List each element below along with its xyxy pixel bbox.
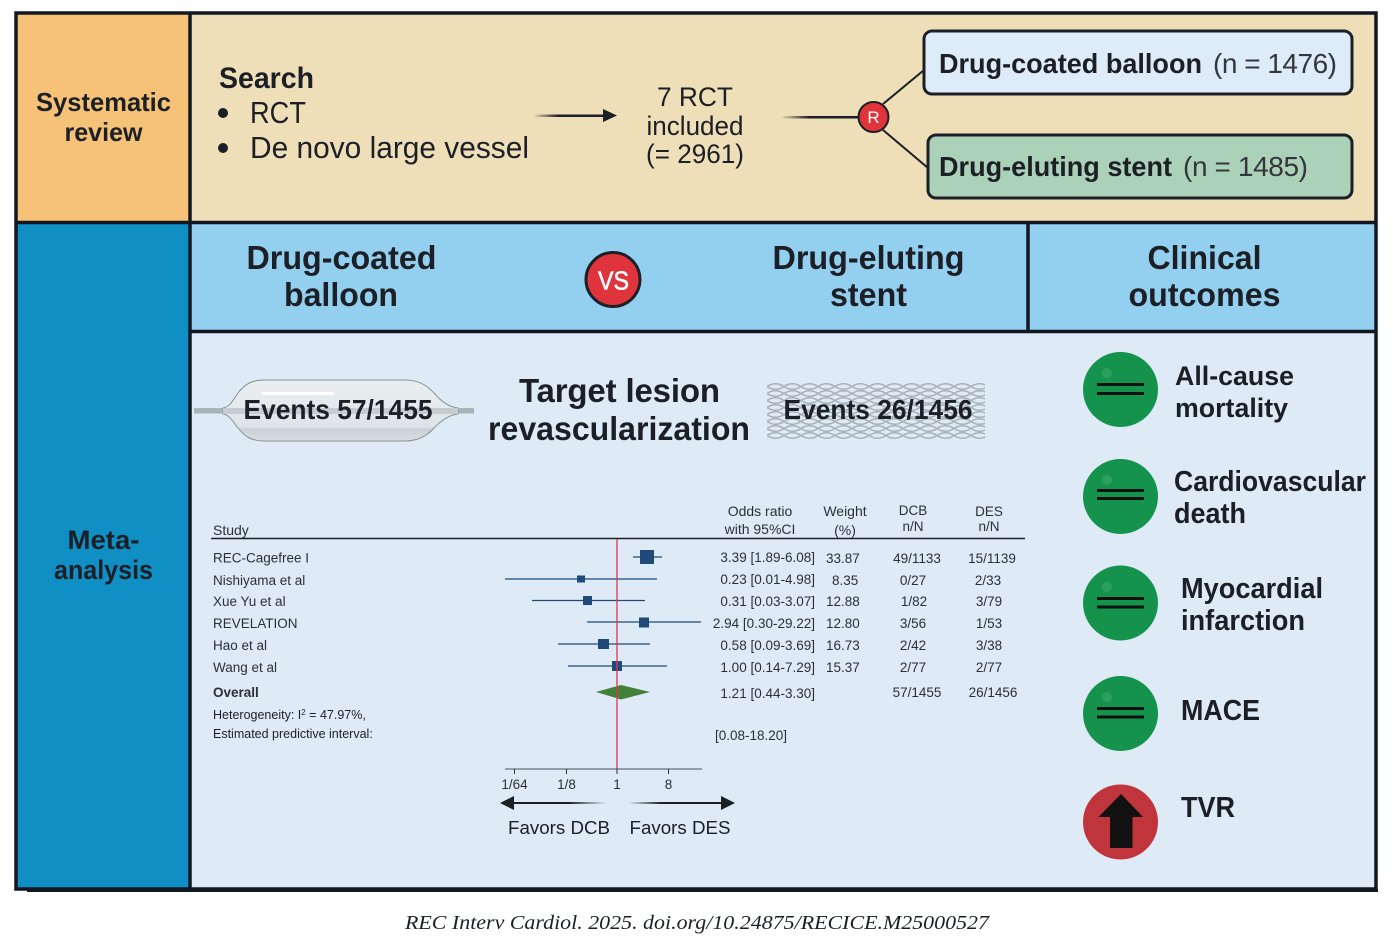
icon: stent with events: Events 26/1456 bbox=[784, 394, 972, 425]
arm: drug-eluting stent bbox=[928, 135, 1352, 198]
outcome: cardiovascular death: Cardiovascular bbox=[1174, 466, 1366, 498]
overall effect diamond bbox=[596, 685, 650, 700]
forest plot DCB events: 2/42 bbox=[900, 638, 926, 653]
included trials text: (= 2961) bbox=[646, 139, 744, 169]
forest plot DCB events bbox=[893, 551, 941, 700]
forest plot DES events: 3/79 bbox=[976, 594, 1002, 609]
outcome: myocardial infarction bbox=[1083, 566, 1323, 640]
forest plot study names: = 47.97%, bbox=[306, 708, 366, 722]
forest plot axis: 1 bbox=[613, 777, 621, 792]
panel: comparison header bbox=[190, 224, 1028, 331]
outcome: all-cause mortality bbox=[1083, 352, 1294, 427]
randomization connector: R bbox=[867, 108, 880, 127]
icon: balloon with events bbox=[194, 380, 474, 441]
forest plot weights bbox=[826, 551, 860, 675]
icon: up arrow bbox=[1083, 784, 1158, 860]
panel: meta-analysis label bbox=[17, 224, 190, 888]
panel: clinical outcomes header: outcomes bbox=[1128, 276, 1280, 313]
search criteria text: De novo large vessel bbox=[250, 130, 529, 165]
forest plot weights: 12.80 bbox=[826, 616, 860, 631]
forest plot column headers: Weight bbox=[823, 503, 867, 519]
forest plot DCB events: 2/77 bbox=[900, 660, 926, 675]
forest plot study names: REVELATION bbox=[213, 616, 298, 631]
outcome: TVR: TVR bbox=[1181, 792, 1235, 824]
arrow: favors DCB: Favors DCB bbox=[508, 817, 610, 838]
forest plot weights: 15.37 bbox=[826, 660, 860, 675]
icon: stent with events bbox=[767, 383, 985, 439]
forest plot column headers: with 95%CI bbox=[724, 521, 795, 537]
search criteria text bbox=[218, 62, 529, 165]
outcome: MACE bbox=[1083, 676, 1260, 751]
forest plot study names: Xue Yu et al bbox=[213, 594, 286, 609]
no-effect reference line bbox=[616, 539, 618, 769]
forest plot study names: Heterogeneity: I bbox=[213, 708, 301, 722]
forest plot DCB events: 0/27 bbox=[900, 573, 926, 588]
included trials text bbox=[646, 82, 744, 169]
forest plot DES events bbox=[968, 551, 1017, 700]
heading: drug-coated balloon: balloon bbox=[284, 276, 398, 313]
icon: equal bbox=[1083, 676, 1158, 751]
arm: drug-eluting stent: (n = 1485) bbox=[1183, 151, 1308, 182]
forest plot study names: Nishiyama et al bbox=[213, 573, 305, 588]
heading: target lesion revascularization: Target lesion bbox=[519, 372, 720, 409]
forest plot odds ratio values: 2.94 [0.30-29.22] bbox=[713, 616, 815, 631]
forest plot DCB events: 3/56 bbox=[900, 616, 926, 631]
arm: drug-coated balloon: (n = 1476) bbox=[1213, 48, 1337, 79]
icon: versus badge bbox=[586, 252, 640, 306]
forest plot axis bbox=[501, 769, 702, 792]
forest plot DCB events: 1/82 bbox=[901, 594, 927, 609]
search criteria text: Search bbox=[219, 62, 314, 95]
heading: drug-eluting stent: Drug-eluting bbox=[772, 239, 964, 276]
forest plot odds ratio values: [0.08-18.20] bbox=[715, 728, 787, 743]
forest plot study names: Wang et al bbox=[213, 660, 277, 675]
panel: systematic review label bbox=[17, 14, 190, 222]
outcome: all-cause mortality: All-cause bbox=[1175, 361, 1294, 391]
forest plot column headers: DCB bbox=[899, 503, 927, 518]
forest plot DES events: 2/33 bbox=[975, 573, 1001, 588]
included trials text: 7 RCT bbox=[657, 82, 733, 112]
panel: systematic review flow bbox=[190, 14, 1376, 222]
arm: drug-eluting stent: Drug-eluting stent bbox=[939, 151, 1172, 182]
forest plot odds ratio values: 0.31 [0.03-3.07] bbox=[720, 594, 815, 609]
panel: systematic review label: review bbox=[64, 117, 143, 147]
forest plot odds ratio values: 1.00 [0.14-7.29] bbox=[720, 660, 815, 675]
forest plot DCB events: 57/1455 bbox=[893, 685, 941, 700]
forest plot DES events: 2/77 bbox=[976, 660, 1002, 675]
panel: clinical outcomes header bbox=[1028, 224, 1376, 331]
forest plot study names: Estimated predictive interval: bbox=[213, 727, 373, 741]
forest plot DES events: 3/38 bbox=[976, 638, 1002, 653]
forest plot weights: 12.88 bbox=[826, 594, 860, 609]
forest plot axis: 1/64 bbox=[501, 777, 528, 792]
arrow: search to included bbox=[533, 109, 617, 122]
included trials text: included bbox=[646, 111, 744, 141]
forest plot odds ratio values bbox=[713, 550, 815, 743]
forest plot weights: 33.87 bbox=[826, 551, 860, 566]
heading: target lesion revascularization bbox=[488, 372, 750, 447]
arm: drug-coated balloon bbox=[924, 31, 1352, 94]
forest plot odds ratio values: 0.23 [0.01-4.98] bbox=[720, 572, 815, 587]
heading: drug-coated balloon: Drug-coated bbox=[246, 239, 436, 276]
forest plot study names: 2 bbox=[301, 708, 306, 717]
outcome: myocardial infarction: Myocardial bbox=[1181, 573, 1323, 605]
forest plot odds ratio values: 1.21 [0.44-3.30] bbox=[720, 686, 815, 701]
heading: drug-eluting stent bbox=[772, 239, 964, 313]
heading: target lesion revascularization: revascularization bbox=[488, 410, 750, 447]
forest plot weights: 8.35 bbox=[832, 573, 858, 588]
forest plot DCB events: 49/1133 bbox=[893, 551, 941, 566]
forest plot study names: Hao et al bbox=[213, 638, 267, 653]
forest plot column headers bbox=[213, 503, 1003, 538]
heading: drug-coated balloon bbox=[246, 239, 436, 313]
arrow: favors DES bbox=[628, 796, 735, 838]
citation: REC Interv Cardiol. 2025. doi.org/10.24875/RECICE.M25000527 bbox=[404, 912, 990, 934]
forest plot column headers: n/N bbox=[978, 519, 1000, 534]
outcome: myocardial infarction: infarction bbox=[1181, 605, 1305, 637]
panel: results bbox=[190, 332, 1376, 888]
randomization connector bbox=[781, 70, 928, 168]
panel: clinical outcomes header: Clinical bbox=[1148, 239, 1262, 276]
outcome: cardiovascular death: death bbox=[1174, 498, 1246, 530]
forest plot study names: REC-Cagefree I bbox=[213, 550, 309, 566]
forest plot axis: 8 bbox=[665, 777, 672, 792]
forest plot study names: Overall bbox=[213, 685, 259, 700]
forest plot study names bbox=[213, 550, 373, 741]
outcome: all-cause mortality: mortality bbox=[1175, 393, 1288, 423]
outcome: cardiovascular death bbox=[1083, 459, 1366, 534]
icon: versus badge: VS bbox=[598, 268, 629, 296]
outcome: MACE: MACE bbox=[1181, 695, 1260, 727]
forest plot DES events: 26/1456 bbox=[969, 685, 1017, 700]
forest plot confidence intervals and markers bbox=[505, 550, 701, 671]
icon: balloon with events: Events 57/1455 bbox=[244, 394, 432, 425]
panel: systematic review label: Systematic bbox=[36, 87, 171, 117]
panel: meta-analysis label: Meta- bbox=[68, 525, 140, 555]
forest plot odds ratio values: 3.39 [1.89-6.08] bbox=[720, 550, 815, 565]
forest plot DES events: 1/53 bbox=[976, 616, 1002, 631]
chart: forest plot bbox=[211, 503, 1025, 838]
arm: drug-coated balloon: Drug-coated balloon bbox=[939, 48, 1202, 79]
forest plot odds ratio values: 0.58 [0.09-3.69] bbox=[720, 638, 815, 653]
icon: equal bbox=[1083, 352, 1158, 427]
search criteria text: RCT bbox=[250, 95, 306, 130]
arrow: favors DES: Favors DES bbox=[630, 817, 730, 838]
forest plot axis: 1/8 bbox=[557, 777, 576, 792]
forest plot weights: 16.73 bbox=[826, 638, 860, 653]
outcome: TVR bbox=[1083, 784, 1235, 860]
icon: equal bbox=[1083, 566, 1158, 640]
forest plot column headers: (%) bbox=[834, 522, 856, 538]
forest plot column headers: Odds ratio bbox=[728, 503, 793, 519]
forest plot DES events: 15/1139 bbox=[968, 551, 1016, 566]
forest plot column headers: n/N bbox=[902, 519, 924, 534]
panel: meta-analysis label: analysis bbox=[54, 555, 153, 585]
forest plot column headers: DES bbox=[975, 504, 1003, 519]
arrow: favors DCB bbox=[500, 796, 610, 838]
forest plot column headers: Study bbox=[213, 522, 249, 538]
icon: equal bbox=[1083, 459, 1158, 534]
heading: drug-eluting stent: stent bbox=[830, 276, 907, 313]
